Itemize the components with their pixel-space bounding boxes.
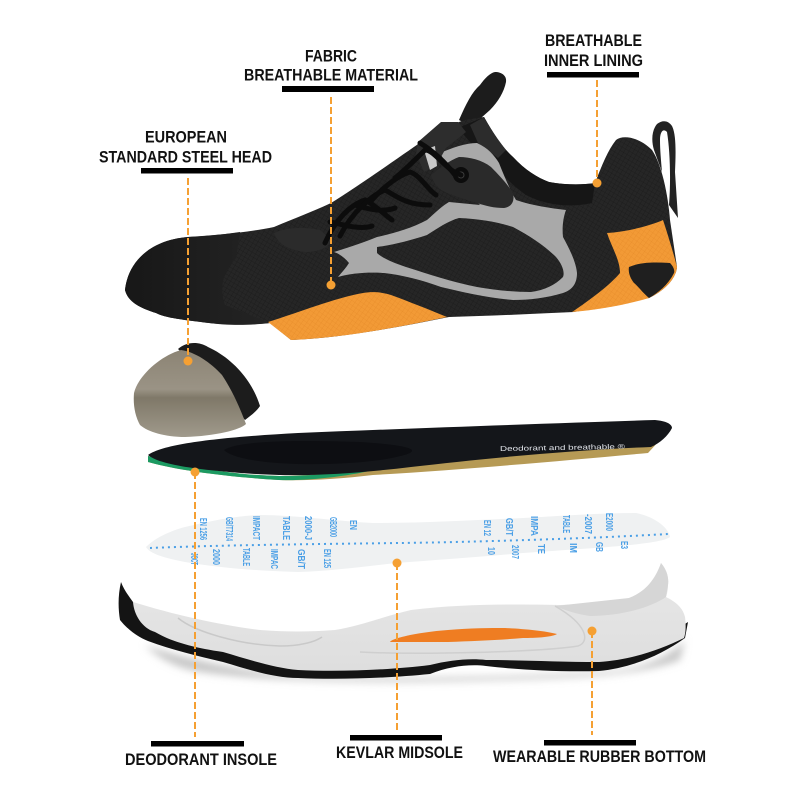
label: kevlar midsole: KEVLAR MIDSOLE [336,744,463,762]
heel loop [652,121,678,218]
blue print: 2000-J [302,516,313,540]
blue print: EN 125 [321,549,332,568]
blue print: GB [593,542,604,552]
laces [325,143,461,243]
insole leader [190,468,200,737]
label: steel head: EUROPEAN [145,128,227,146]
upper [125,117,677,340]
midsole and rubber outsole [119,563,688,682]
tan and green edge [148,440,660,480]
blue print: 2000 [210,549,221,565]
blue print: E2000 [603,513,614,531]
eyelet [453,167,469,183]
blue print: 2007 [509,545,520,559]
collar lining [458,117,595,205]
blue print: GB2000 [327,517,338,537]
heel cup shade [555,563,668,616]
blue print: GB/T [295,549,306,569]
blue print: IMPACT [250,516,261,540]
blue print: EN [347,520,358,530]
label: rubber bottom: WEARABLE RUBBER BOTTOM [493,748,706,766]
side dark panel [377,218,564,292]
blue print: JOCT [188,553,199,565]
foot bed [224,441,412,464]
label: deodorant insole [125,741,277,769]
black band [178,343,260,420]
fabric leader [326,97,336,290]
black outsole [119,582,688,679]
label: inner lining: INNER LINING [544,52,643,70]
blue print: EN 12 [481,520,492,536]
blue print: GB/T7314 [223,517,234,541]
heel dark insert [629,262,674,298]
eyelet patch [431,157,514,208]
blue print: IM [567,543,578,553]
label: steel head: STANDARD STEEL HEAD [99,148,272,166]
deodorant insole [148,420,672,480]
blue print: IMPAC [268,549,279,569]
toe cap shading [125,232,270,325]
lining leader [592,80,602,188]
ground shadow [145,640,685,682]
blue print: 10 [485,547,496,555]
steel head leader [184,178,192,366]
moulded line [178,618,322,646]
silver stripe [334,143,577,300]
shoe [125,72,678,340]
steel body [134,350,246,437]
label: rubber bottom [493,740,706,766]
label: inner lining: BREATHABLE [545,32,642,50]
white midsole [133,563,686,671]
blue print: E3 [618,541,629,549]
label: fabric: FABRIC [305,48,357,66]
mesh tongue [470,117,506,158]
label: steel head [99,128,272,174]
blue print: TABLE [560,515,571,533]
pull loop tongue [459,72,506,126]
midsole leader [392,558,402,733]
blue print: TABLE [280,516,291,540]
blue print: GB/T [503,518,514,536]
label: inner lining [544,32,643,78]
blue print: TABLE [240,548,251,566]
label: fabric [244,48,418,92]
tongue label [416,122,466,172]
blue print [188,513,629,569]
orange heel [572,220,677,312]
blue print: TE [535,544,546,554]
blue print: EN 1256 [197,518,208,540]
steel toe cap [134,343,260,437]
orange forefoot sole [268,292,447,340]
label: deodorant insole: DEODORANT INSOLE [125,751,277,769]
top face [148,420,672,475]
insole print: Deodorant and breathable ® [500,443,626,453]
bottom leader [588,626,596,735]
blue print: IMPA [528,516,539,536]
forefoot panel [274,228,332,252]
printed paper insole [146,513,670,572]
dotted seam [150,534,668,548]
blue print: -2007 [582,514,593,534]
kevlar orange wedge [390,628,557,642]
callout lines and dots [184,80,602,737]
label: kevlar midsole [336,735,463,762]
label: fabric: BREATHABLE MATERIAL [244,66,418,84]
